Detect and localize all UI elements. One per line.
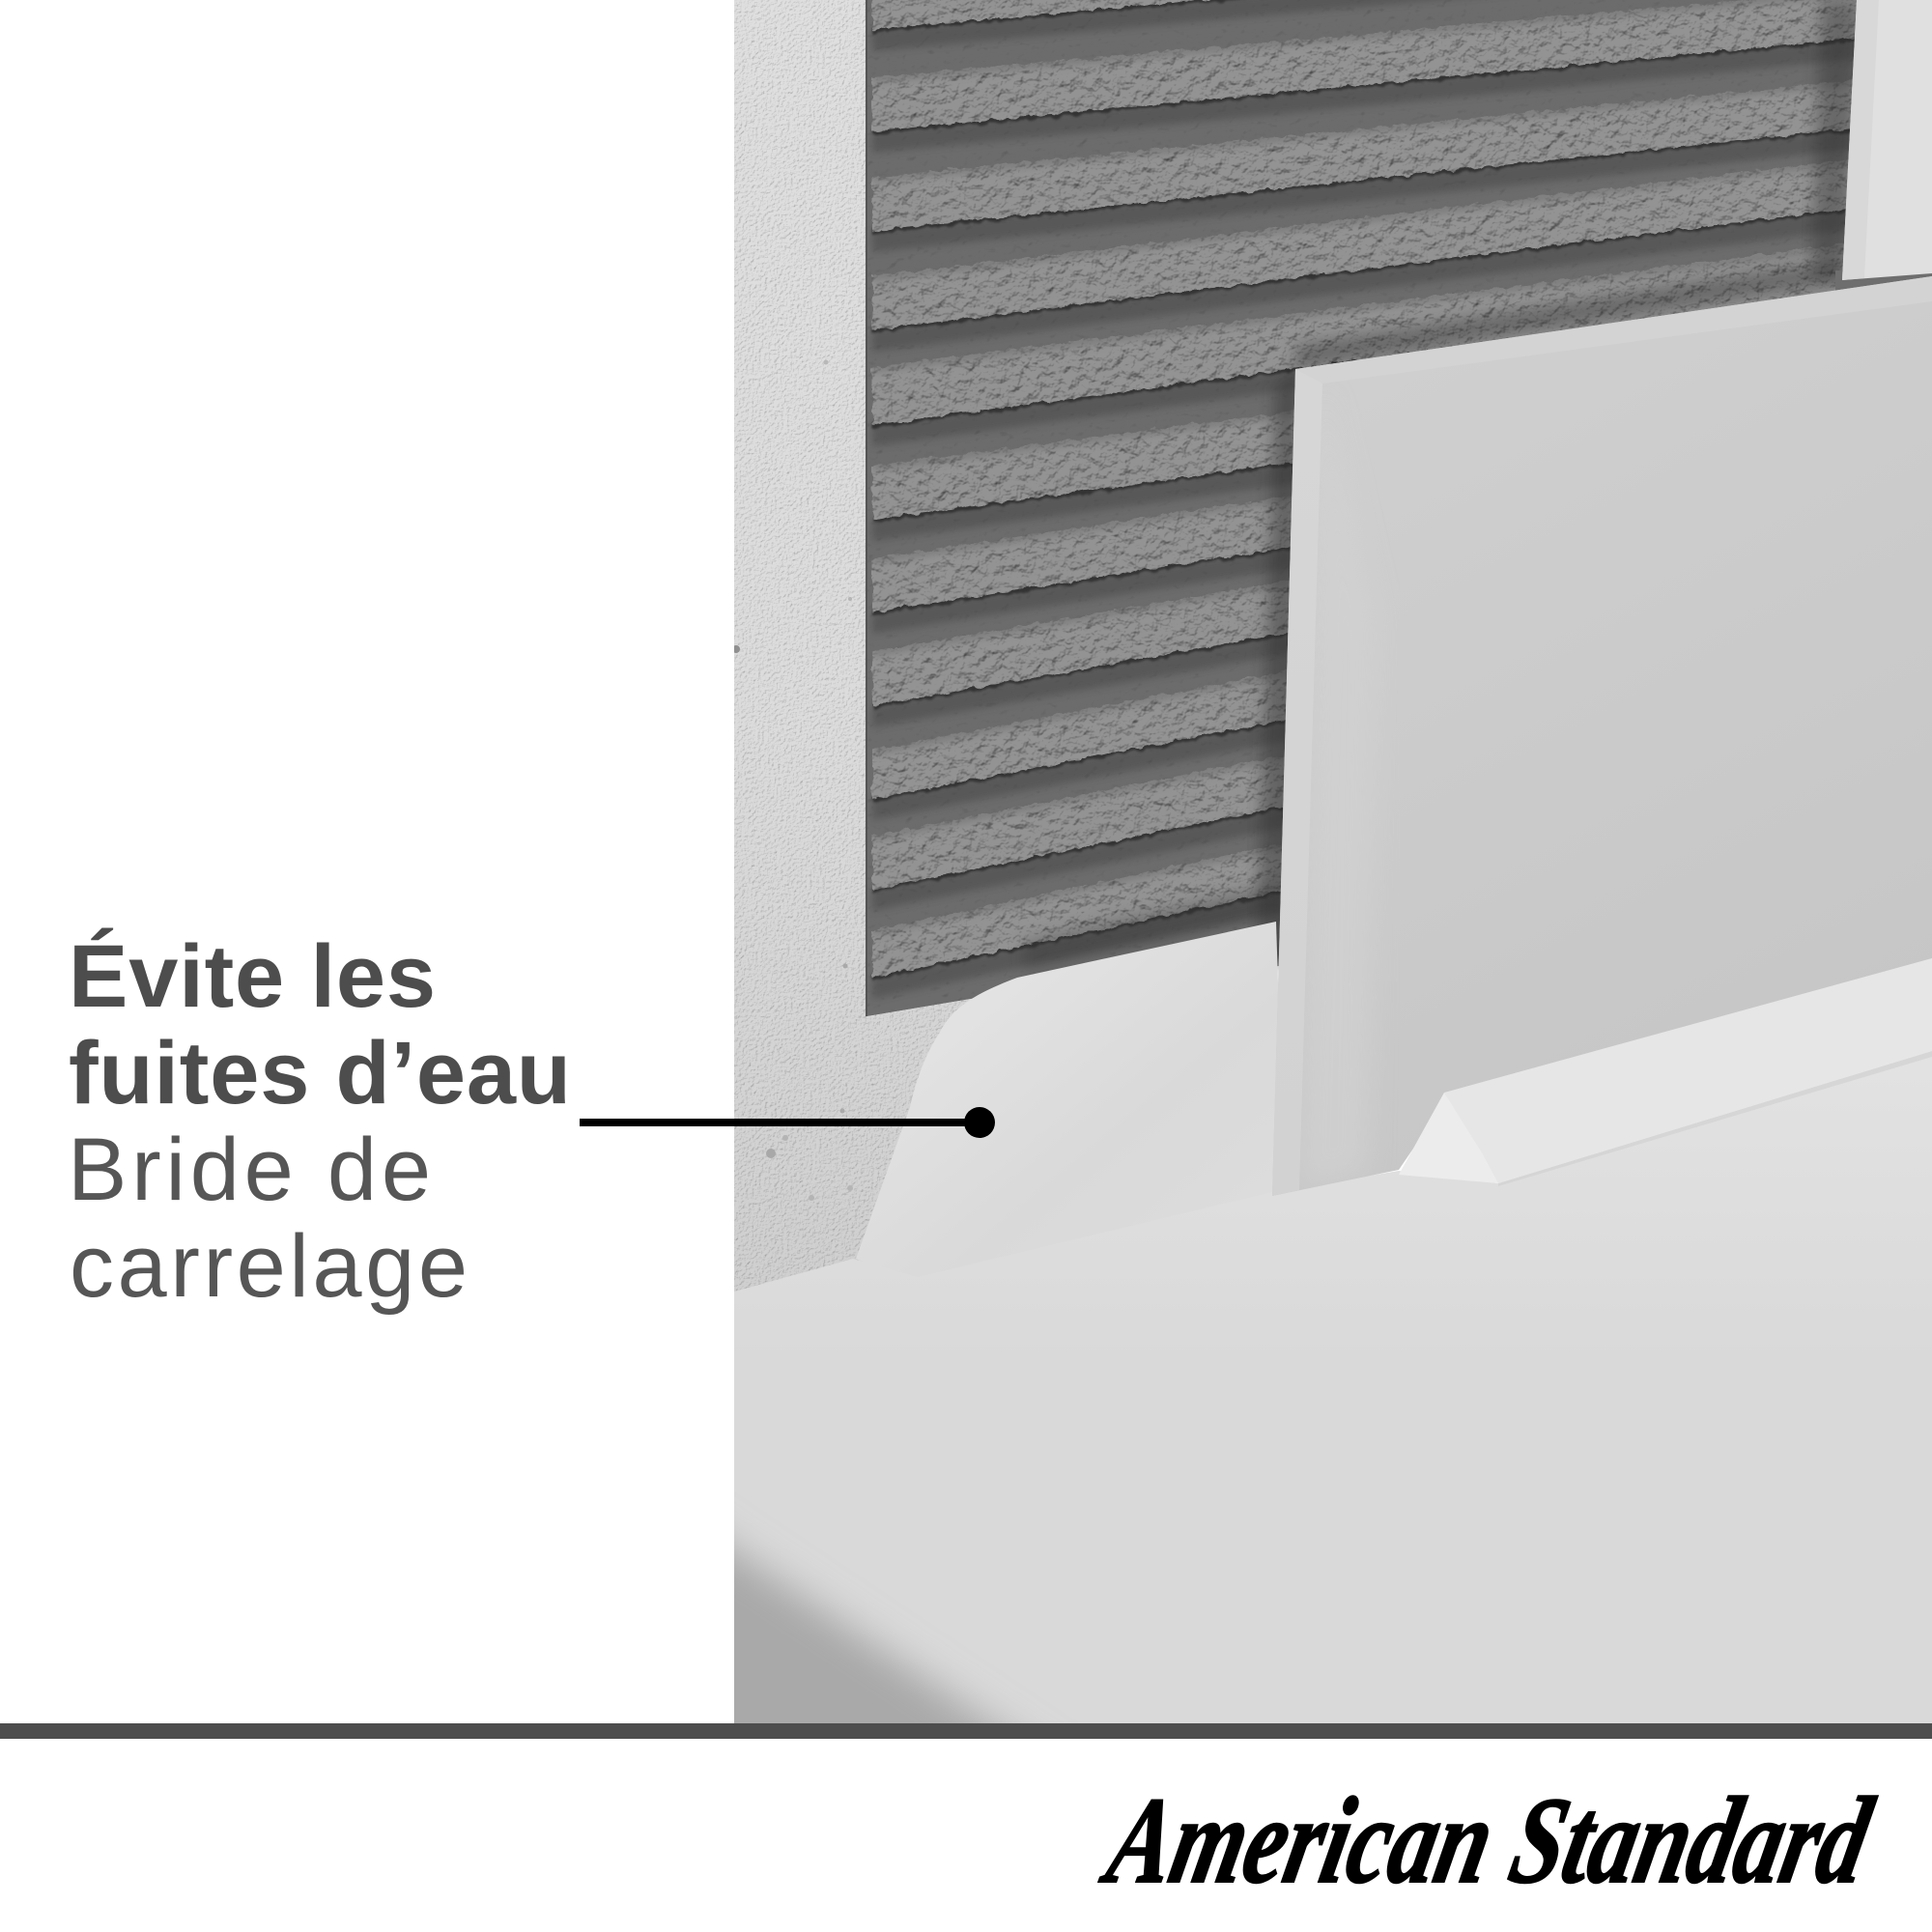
subheading: Bride de (68, 1121, 431, 1219)
adhesive left edge (866, 0, 867, 1016)
subheading (68, 1121, 468, 1316)
tile flange (856, 922, 1285, 1285)
tile soft side sheen (1299, 384, 1377, 1190)
heading: fuites d’eau (69, 1024, 571, 1122)
rib soft shadows (872, 0, 1864, 999)
adhesive ribs (872, 0, 1864, 978)
main tile (1272, 276, 1932, 1196)
gap between tiles (1835, 270, 1932, 290)
adhesive mortar base (867, 0, 1861, 1016)
heading (69, 926, 571, 1122)
tile contact shadow (1256, 367, 1299, 966)
upper right tile (1842, 0, 1932, 280)
blurred foreground corner (734, 1530, 1022, 1723)
callout text (68, 926, 571, 1316)
callout pointer (580, 1107, 995, 1138)
concrete wall (734, 0, 972, 1292)
heading: Évite les (69, 926, 436, 1026)
panel: product photo (734, 0, 1932, 1723)
subheading: carrelage (70, 1217, 468, 1316)
footer divider (0, 1723, 1932, 1739)
tile trim strip (1399, 958, 1932, 1186)
tile bevels (1295, 276, 1932, 369)
rib dark edges (872, 0, 1864, 980)
rib soft top edges (872, 0, 1864, 936)
shelf (734, 1051, 1932, 1724)
